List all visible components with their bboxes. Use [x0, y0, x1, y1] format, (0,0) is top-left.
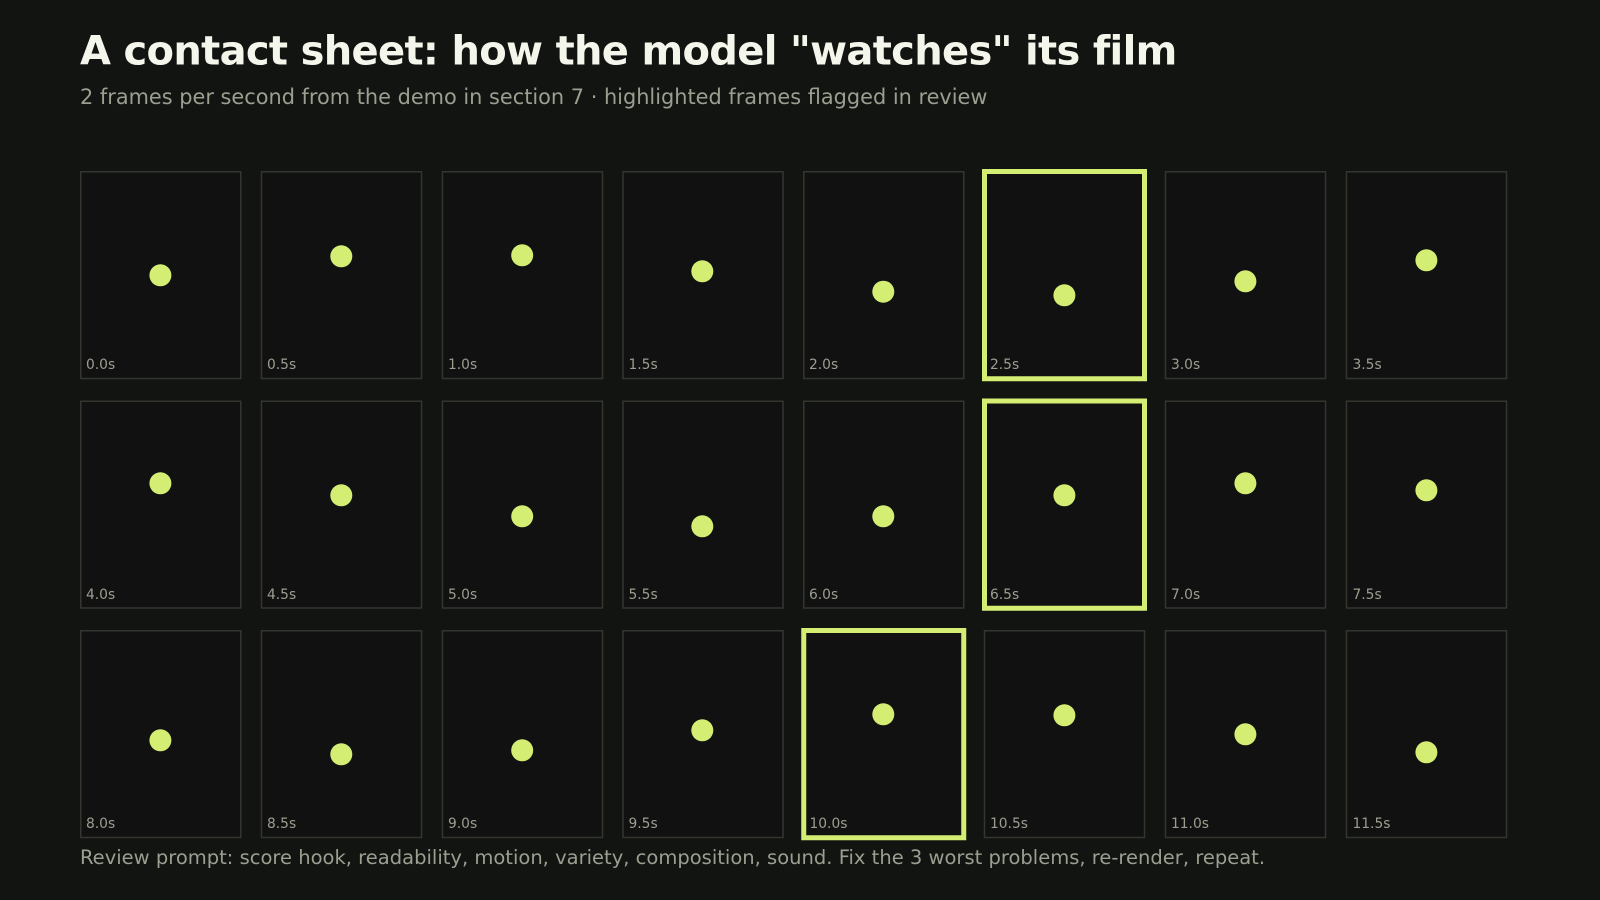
frame 6.5s highlighted: 6.5s: [990, 587, 1019, 603]
frame 3.0s: [1166, 172, 1326, 378]
frame 7.0s: 7.0s: [1171, 587, 1200, 603]
frame 2.0s: [804, 172, 964, 378]
frame 6.0s: 6.0s: [809, 587, 838, 603]
frame 2.5s highlighted: [984, 172, 1144, 379]
frame 0.0s: [81, 172, 241, 378]
frame 7.0s: [1166, 401, 1326, 608]
frame 0.5s: [262, 172, 422, 378]
frame 9.5s: [623, 631, 783, 838]
frame 0.5s: 0.5s: [267, 357, 296, 373]
frame 8.5s: 8.5s: [267, 816, 296, 832]
frame 10.0s highlighted: [804, 630, 964, 838]
frame 4.5s: 4.5s: [267, 587, 296, 603]
frame 10.5s: 10.5s: [990, 816, 1028, 832]
frame 3.5s: [1346, 172, 1506, 378]
frame 9.0s: 9.0s: [448, 816, 477, 832]
frame 6.0s: [804, 401, 964, 608]
frame 8.0s: 8.0s: [86, 816, 115, 832]
frame 8.5s: [262, 631, 422, 838]
frame 5.0s: 5.0s: [448, 587, 477, 603]
frame 4.0s: 4.0s: [86, 587, 115, 603]
frame 8.0s: [81, 631, 241, 838]
review prompt footer: Review prompt: score hook, readability, motion, variety, composition, sound. Fix the 3 worst problems, re-render, repeat.: [80, 846, 1265, 869]
frame 2.0s: 2.0s: [809, 357, 838, 373]
frame 9.0s: [442, 631, 602, 838]
frame 11.0s: [1166, 631, 1326, 838]
frame 9.5s: 9.5s: [628, 816, 658, 832]
frame 11.0s: 11.0s: [1171, 816, 1209, 832]
frame 1.5s: [623, 172, 783, 378]
frame 6.5s highlighted: [984, 401, 1144, 608]
frame 5.5s: 5.5s: [628, 587, 658, 603]
frame 4.5s: [262, 401, 422, 608]
frame 7.5s: 7.5s: [1352, 587, 1382, 603]
frame 1.0s: 1.0s: [448, 357, 477, 373]
frame 11.5s: 11.5s: [1352, 816, 1390, 832]
subtitle: 2 frames per second from the demo in section 7 · highlighted frames flagged in review: [80, 85, 987, 109]
frame 2.5s highlighted: 2.5s: [990, 357, 1019, 373]
frame 11.5s: [1346, 631, 1506, 838]
frame 5.0s: [442, 401, 602, 608]
frame 1.0s: [442, 172, 602, 378]
frame 3.0s: 3.0s: [1171, 357, 1200, 373]
frame 10.5s: [984, 631, 1144, 838]
frame 1.5s: 1.5s: [628, 357, 658, 373]
frame 3.5s: 3.5s: [1352, 357, 1382, 373]
title: A contact sheet: how the model "watches" its film: [80, 28, 1177, 74]
frame 10.0s highlighted: 10.0s: [810, 816, 847, 832]
frame 5.5s: [623, 401, 783, 608]
frame 7.5s: [1346, 401, 1506, 608]
frame 4.0s: [81, 401, 241, 608]
frame 0.0s: 0.0s: [86, 357, 115, 373]
